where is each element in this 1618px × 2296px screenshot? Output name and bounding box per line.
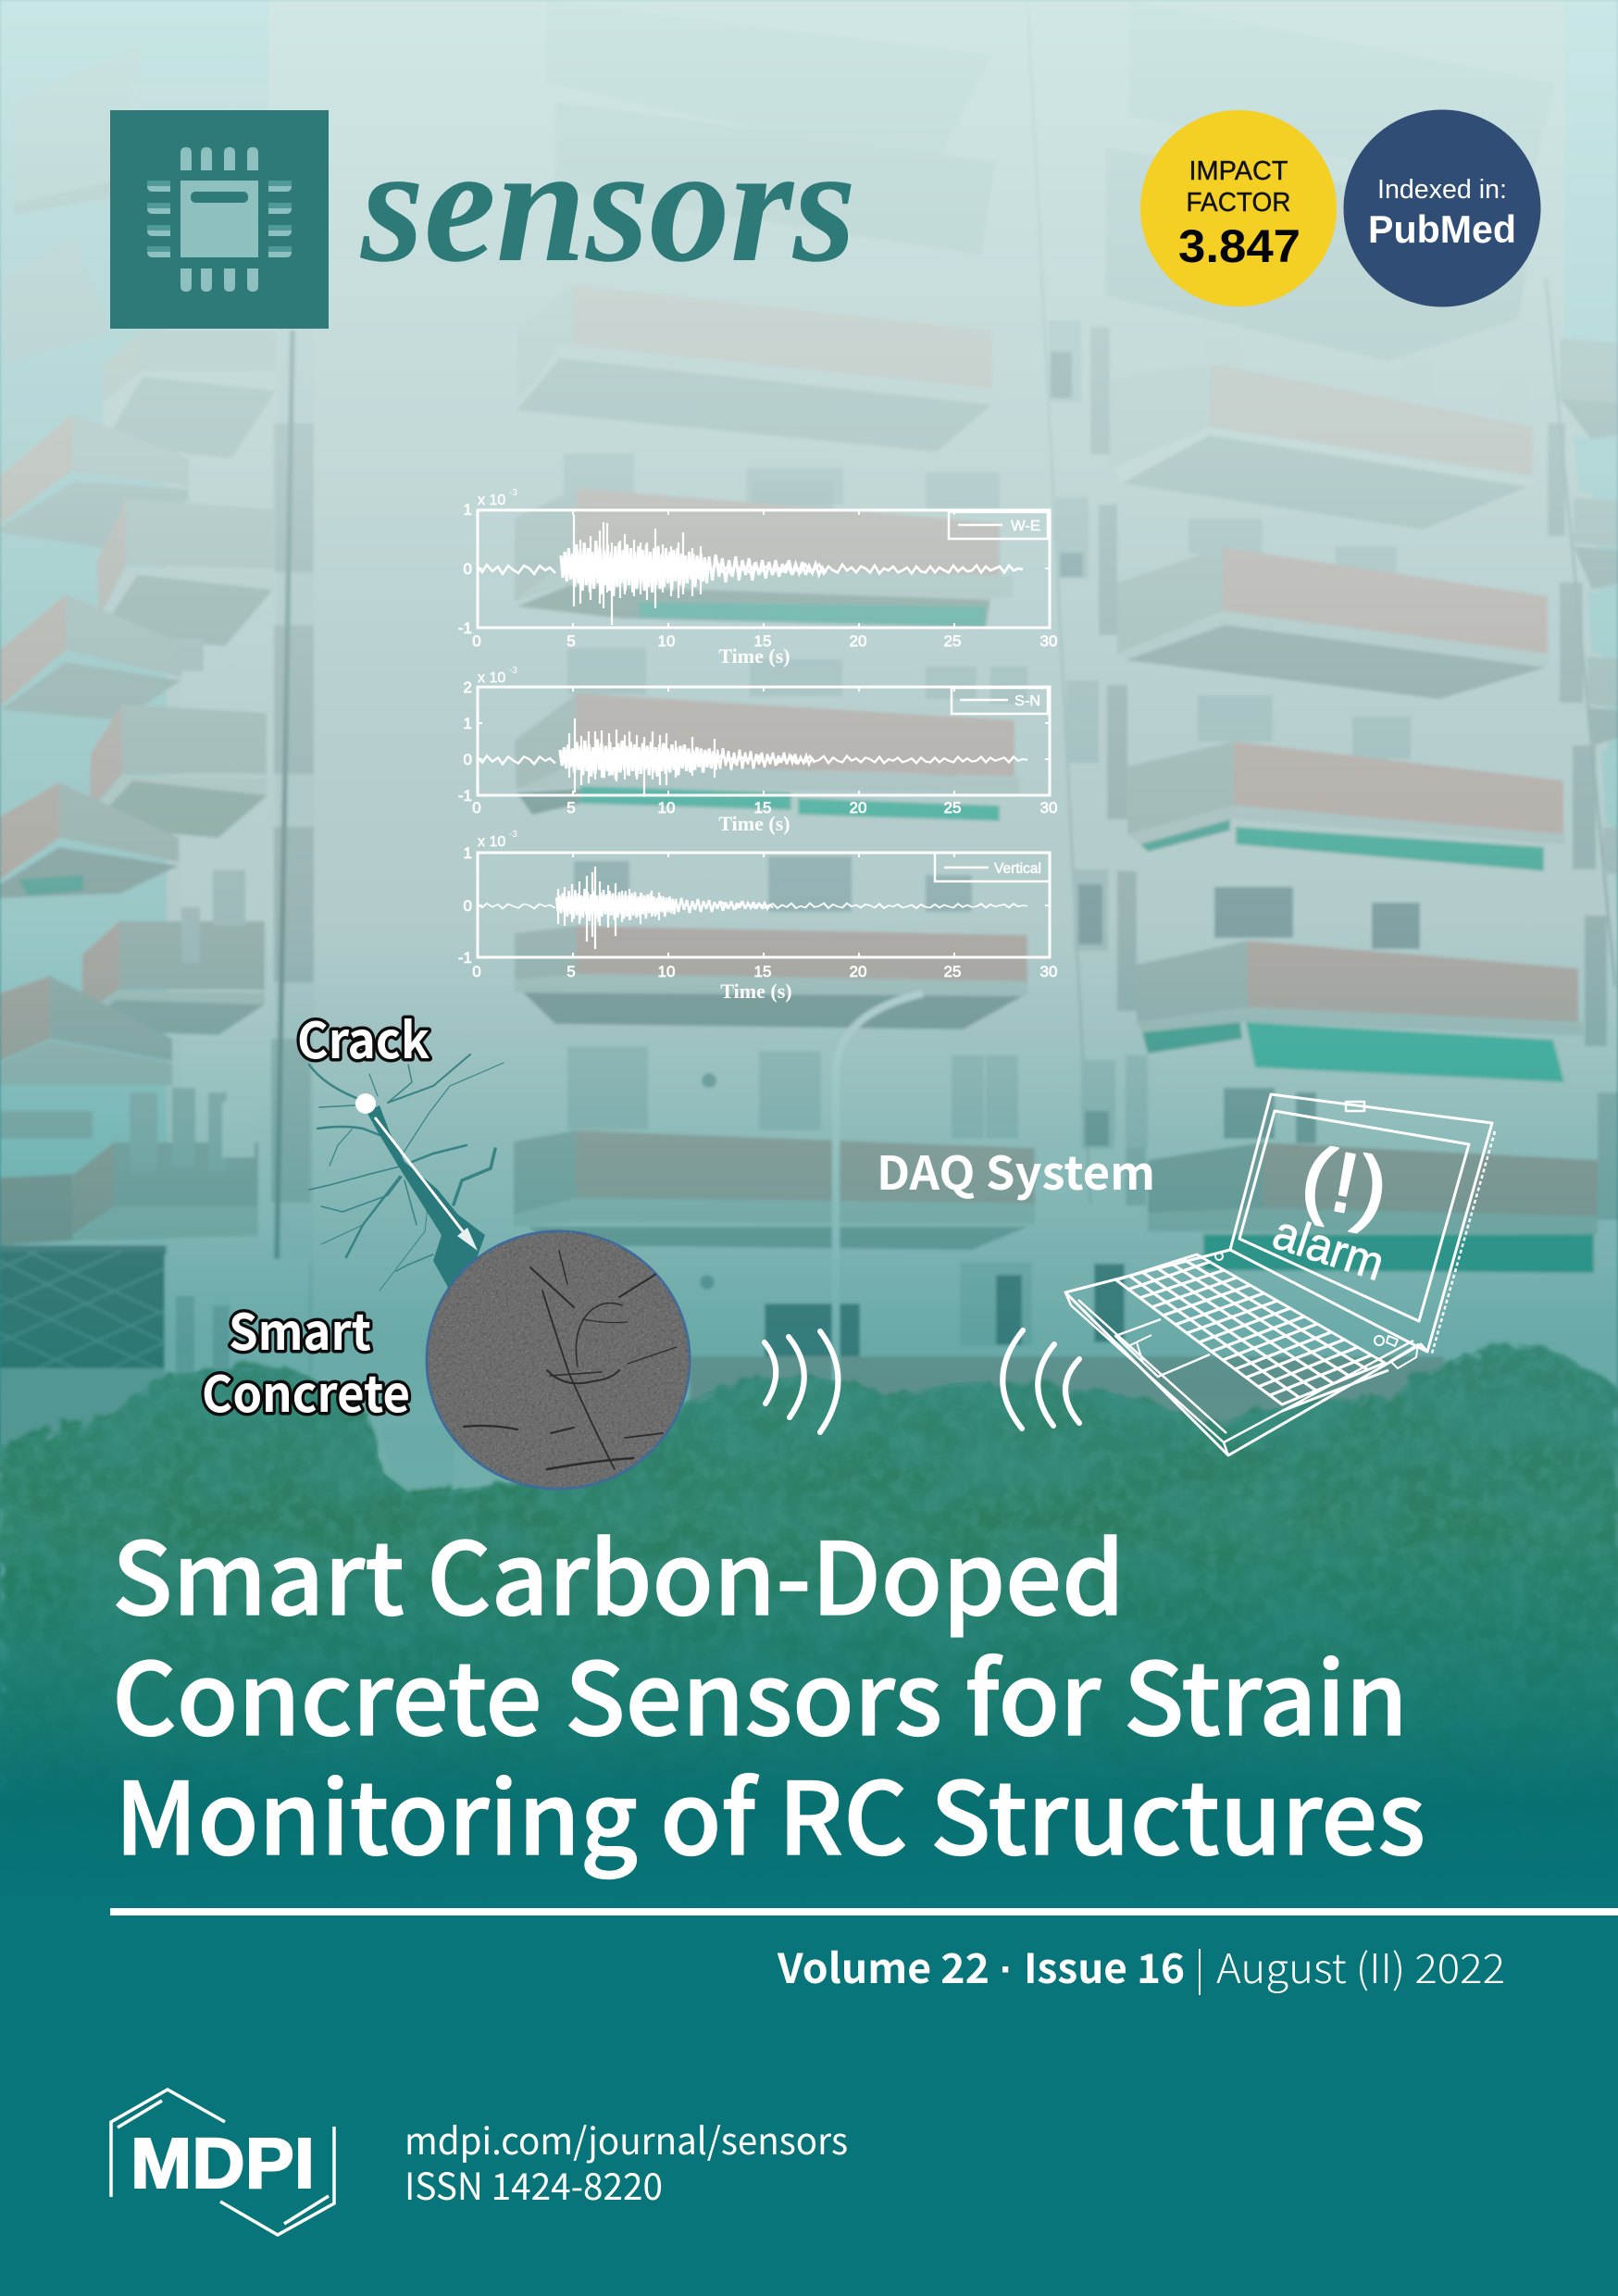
badge: impact factor: FACTOR xyxy=(1187,188,1290,218)
chart: S-N seismic signal: 25 xyxy=(944,799,961,817)
label: Smart Concrete: Smart xyxy=(229,1292,371,1365)
badge: impact factor: 3.847 xyxy=(1178,220,1301,272)
chart: W-E seismic signal: 5 xyxy=(566,632,576,650)
label: Smart Concrete: Concrete xyxy=(202,1354,410,1427)
wireless waves: outgoing xyxy=(765,1331,839,1432)
pointer from crack to concrete xyxy=(355,1093,478,1251)
lattice fence xyxy=(0,1252,165,1368)
chart: S-N seismic signal: -1 xyxy=(458,787,472,805)
label: DAQ System: DAQ System xyxy=(877,1137,1155,1204)
chart: W-E seismic signal: 10 xyxy=(658,632,675,650)
chart: vertical seismic signal: 0 xyxy=(472,963,481,980)
article title: Monitoring of RC Structures xyxy=(115,1740,1425,1884)
chart: vertical seismic signal: 5 xyxy=(566,963,576,980)
pale sky at edges xyxy=(1564,0,1618,398)
issue information: August (II) 2022 xyxy=(1216,1936,1505,1995)
trees xyxy=(0,1341,1618,1794)
journal logo tile xyxy=(110,110,329,329)
chart: W-E seismic signal: 1 xyxy=(464,501,472,518)
MDPI logo xyxy=(111,2090,334,2235)
chart: W-E seismic signal: Time (s) xyxy=(718,644,790,668)
issue information: Volume 22 xyxy=(777,1936,989,1995)
chart: S-N seismic signal: 5 xyxy=(566,799,576,817)
chart: W-E seismic signal: W-E xyxy=(1011,518,1040,534)
chart: vertical seismic signal: Time (s) xyxy=(720,980,792,1003)
chart: W-E seismic signal: -3 xyxy=(509,488,517,498)
title rule xyxy=(110,1908,1618,1915)
background: apartment building photograph xyxy=(0,0,1618,1822)
chart: vertical seismic signal xyxy=(458,830,1057,1003)
label: Crack: Crack xyxy=(297,1000,429,1073)
chart: vertical seismic signal: 30 xyxy=(1040,963,1057,980)
chart: W-E seismic signal xyxy=(458,488,1057,668)
chart: vertical seismic signal: 15 xyxy=(754,963,771,980)
chart: S-N seismic signal: Time (s) xyxy=(718,812,790,835)
chart: vertical seismic signal: 10 xyxy=(658,963,675,980)
chart: S-N seismic signal: 2 xyxy=(464,679,472,696)
badge: PubMed: Indexed in: xyxy=(1377,175,1507,205)
chart: S-N seismic signal xyxy=(458,666,1057,835)
article title: Concrete Sensors for Strain xyxy=(112,1620,1408,1765)
chart: vertical seismic signal: Vertical xyxy=(994,861,1041,877)
chart: S-N seismic signal: -3 xyxy=(509,666,517,676)
chart: W-E seismic signal: x 10 xyxy=(478,493,505,508)
chart: vertical seismic signal: 20 xyxy=(850,963,866,980)
badge: PubMed: PubMed xyxy=(1368,207,1516,251)
right balconies xyxy=(1210,363,1533,476)
issue information: · xyxy=(1000,1947,1014,1992)
facade wall xyxy=(0,0,1618,1666)
journal website and ISSN: ISSN 1424-8220 xyxy=(404,2157,663,2211)
chart: W-E seismic signal: 15 xyxy=(754,632,771,650)
chart: S-N seismic signal: 30 xyxy=(1040,799,1057,817)
center balconies xyxy=(573,285,992,389)
chart: vertical seismic signal: x 10 xyxy=(478,834,505,850)
journal name: sensors xyxy=(360,112,856,296)
chart: S-N seismic signal: x 10 xyxy=(478,670,505,686)
crack illustration xyxy=(309,1054,504,1291)
chart: W-E seismic signal: 25 xyxy=(944,632,961,650)
street lamp xyxy=(836,993,923,1537)
MDPI logo: MDPI xyxy=(131,2124,315,2203)
chart: S-N seismic signal: 10 xyxy=(658,799,675,817)
chart: vertical seismic signal: -1 xyxy=(458,949,472,967)
chart: vertical seismic signal: 0 xyxy=(464,897,472,915)
chart: vertical seismic signal: 1 xyxy=(464,844,472,862)
wireless waves: incoming xyxy=(1002,1330,1079,1429)
left balconies xyxy=(143,331,276,370)
chart: vertical seismic signal: 25 xyxy=(944,963,961,980)
laptop with alarm: alarm xyxy=(1266,1205,1390,1292)
white column by the hedge xyxy=(381,1426,454,1518)
chart: W-E seismic signal: 0 xyxy=(464,560,472,578)
chart: W-E seismic signal: 30 xyxy=(1040,632,1057,650)
issue information: Issue 16 xyxy=(1024,1936,1185,1995)
issue information xyxy=(777,1936,1505,1995)
chart: S-N seismic signal: 15 xyxy=(754,799,771,817)
journal website and ISSN xyxy=(404,2112,848,2211)
chart: S-N seismic signal: 0 xyxy=(472,799,481,817)
badge: impact factor xyxy=(1140,110,1337,306)
laptop with alarm: (!) xyxy=(1294,1129,1396,1238)
windows xyxy=(564,320,1411,1345)
label: Smart Concrete xyxy=(202,1292,410,1427)
laptop with alarm xyxy=(1065,1094,1495,1455)
chart: W-E seismic signal: 0 xyxy=(472,632,481,650)
chart: W-E seismic signal: -1 xyxy=(458,619,472,637)
top faint floors xyxy=(546,0,992,167)
chart: S-N seismic signal: 1 xyxy=(464,715,472,732)
chart: vertical seismic signal: -3 xyxy=(509,830,517,840)
chart: S-N seismic signal: 0 xyxy=(464,751,472,768)
badge: PubMed xyxy=(1344,109,1540,307)
badge: impact factor: IMPACT xyxy=(1189,156,1288,186)
chart: W-E seismic signal: 20 xyxy=(850,632,866,650)
chart: S-N seismic signal: 20 xyxy=(850,799,866,817)
chart: S-N seismic signal: S-N xyxy=(1014,693,1040,709)
article title xyxy=(112,1500,1425,1884)
article title: Smart Carbon-Doped xyxy=(112,1500,1125,1644)
journal website and ISSN: mdpi.com/journal/sensors xyxy=(404,2112,848,2165)
concrete sample micrograph xyxy=(426,1229,691,1491)
